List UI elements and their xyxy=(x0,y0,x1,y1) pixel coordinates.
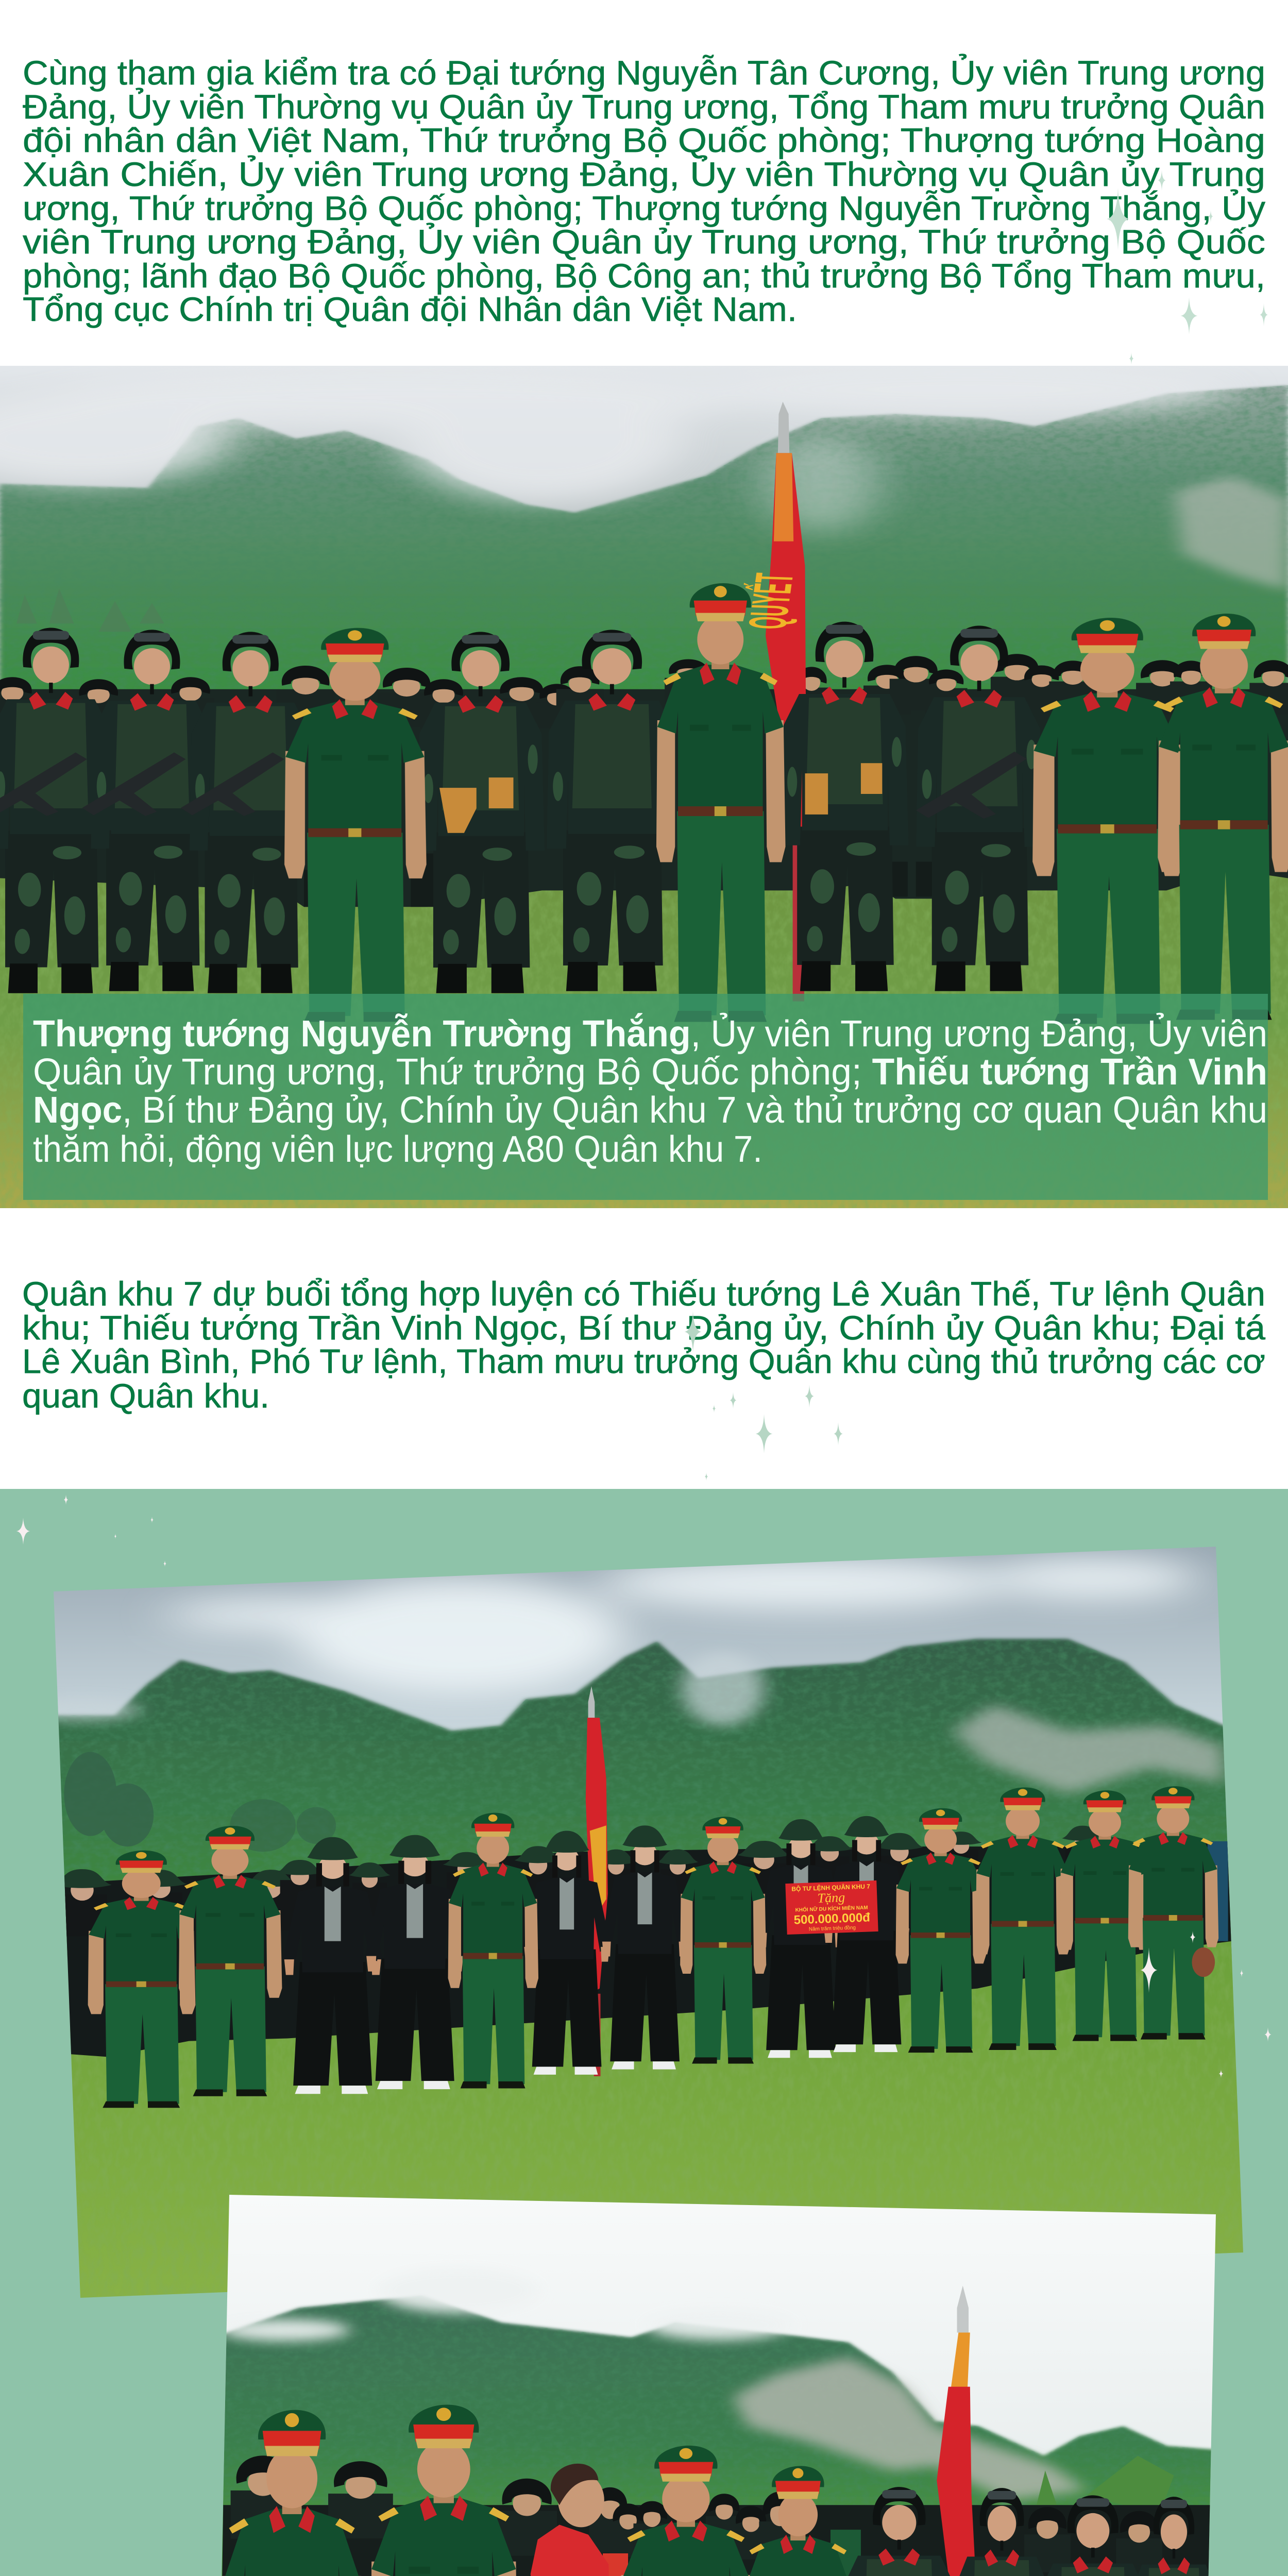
photo 2 foliage texture xyxy=(212,2296,1232,2576)
photo 1 grass field xyxy=(49,1920,1257,2325)
sparkles: middle section xyxy=(684,1311,843,1481)
photo 1 gift jug xyxy=(1192,1947,1215,1977)
caption text: thăm hỏi, động viên lực lượng A80 Quân khu 7. xyxy=(33,1129,762,1170)
hero flag: QUYẾT xyxy=(738,572,805,630)
photo 2 woman in red xyxy=(502,2464,611,2576)
text block: intro paragraph: ương, Thứ trưởng Bộ Quốc phòng; Thượng tướng Nguyễn Trường Thắng, Ủy xyxy=(23,189,1265,227)
text block: intro paragraph: phòng; lãnh đạo Bộ Quốc phòng, Bộ Công an; thủ trưởng Bộ Tổng Tham mưu, xyxy=(23,257,1265,295)
photo 1 trees xyxy=(64,1752,336,1852)
photo: officers and A80 soldiers in front of misty mountain xyxy=(0,361,1288,1211)
text block: Military Region 7 attendees: Quân khu 7 dự buổi tổng hợp luyện có Thiếu tướng Lê Xuân Thế, Tư lệnh Quân xyxy=(22,1275,1265,1313)
photo 1 rock face xyxy=(953,1705,1224,1794)
sparkles: top section xyxy=(1107,170,1268,365)
hero foliage texture xyxy=(0,385,1288,702)
photo 1 award sign xyxy=(785,1880,878,1935)
photo 2 mist over ridge xyxy=(219,2268,791,2341)
photo: officers with woman in red and A80 soldiers xyxy=(198,2190,1232,2576)
photo 2 distant trees xyxy=(1037,2456,1174,2515)
caption text: Quân ủy Trung ương, Thứ trưởng Bộ Quốc phòng; Thiếu tướng Trần Vinh xyxy=(33,1052,1267,1093)
photo 1 award sign: Năm trăm triệu đồng xyxy=(809,1924,856,1933)
text block: intro paragraph: Cùng tham gia kiểm tra có Đại tướng Nguyễn Tân Cương, Ủy viên Trung ương xyxy=(23,54,1265,92)
photo 2 flag xyxy=(937,2286,986,2576)
text block: intro paragraph: Tổng cục Chính trị Quân đội Nhân dân Việt Nam. xyxy=(23,290,797,328)
hero background ranks xyxy=(0,654,1288,907)
hero flag xyxy=(738,402,807,1002)
caption text: Thượng tướng Nguyễn Trường Thắng, Ủy viên Trung ương Đảng, Ủy viên xyxy=(33,1013,1267,1055)
photo 1 officers xyxy=(88,1786,1218,2108)
photo 2 rock face xyxy=(733,2357,1087,2500)
photo 1 women in black xyxy=(282,1816,911,2094)
hero trees xyxy=(16,588,164,632)
photo 1 mountains xyxy=(49,1639,1248,1957)
photo 1 sky xyxy=(33,1536,1257,1831)
hero sky xyxy=(0,361,1288,689)
photo 1 award sign: KHỐI NỮ DU KÍCH MIỀN NAM xyxy=(795,1904,868,1913)
sparkles: over teal panel and photos xyxy=(16,1495,1272,2576)
photo 1 award sign: 500.000.000đ xyxy=(793,1910,871,1927)
photo 2 officers xyxy=(222,2404,853,2576)
photo 1 bright clouds xyxy=(164,1557,1199,1694)
photo: officers and women guerrillas receiving award xyxy=(25,1536,1257,2325)
hero soldiers xyxy=(0,622,1043,993)
hero grass field xyxy=(0,837,1288,1211)
hero mountains xyxy=(0,385,1288,702)
photo 1 flag xyxy=(585,1686,608,2076)
photo 2 sky xyxy=(198,2190,1232,2535)
text block: Military Region 7 attendees: Lê Xuân Bình, Phó Tư lệnh, Tham mưu trưởng Quân khu cùng thủ trưởng các cơ xyxy=(22,1342,1265,1380)
text block: intro paragraph: Đảng, Ủy viên Thường vụ Quân ủy Trung ương, Tổng Tham mưu trưởng Quân xyxy=(23,88,1265,126)
photo 1 background ranks xyxy=(53,1826,1232,2057)
text block: intro paragraph: Xuân Chiến, Ủy viên Trung ương Đảng, Ủy viên Thường vụ Quân ủy Trung xyxy=(23,155,1265,193)
caption text xyxy=(33,1013,1267,1170)
photo 2 soldiers xyxy=(842,2487,1219,2576)
photo 2 background ranks xyxy=(218,2455,1210,2576)
panel: teal photo section xyxy=(0,1489,1288,2576)
photo 1 mist over ridge xyxy=(25,1652,764,1725)
text block: intro paragraph: viên Trung ương Đảng, Ủy viên Quân ủy Trung ương, Thứ trưởng Bộ Quốc xyxy=(23,223,1265,261)
text block: intro paragraph xyxy=(23,54,1265,328)
photo 1 award sign: Tặng xyxy=(817,1890,845,1906)
hero rock face xyxy=(1175,476,1288,590)
photo 2 mountains xyxy=(212,2296,1232,2576)
hero mist xyxy=(0,365,1232,533)
hero officers xyxy=(284,583,1288,1024)
text block: Military Region 7 attendees xyxy=(22,1275,1265,1415)
text block: Military Region 7 attendees: khu; Thiếu tướng Trần Vinh Ngọc, Bí thư Đảng ủy, Chính ủy Quân khu; Đại tá xyxy=(22,1309,1265,1347)
photo 1 foliage texture xyxy=(49,1639,1248,1933)
text block: Military Region 7 attendees: quan Quân khu. xyxy=(22,1377,269,1415)
caption box over hero photo xyxy=(23,994,1268,1200)
caption text: Ngọc, Bí thư Đảng ủy, Chính ủy Quân khu 7 và thủ trưởng cơ quan Quân khu xyxy=(33,1090,1267,1131)
photo 1 award sign: BỘ TƯ LỆNH QUÂN KHU 7 xyxy=(791,1882,871,1893)
text block: intro paragraph: đội nhân dân Việt Nam, Thứ trưởng Bộ Quốc phòng; Thượng tướng Hoàng xyxy=(23,121,1265,159)
